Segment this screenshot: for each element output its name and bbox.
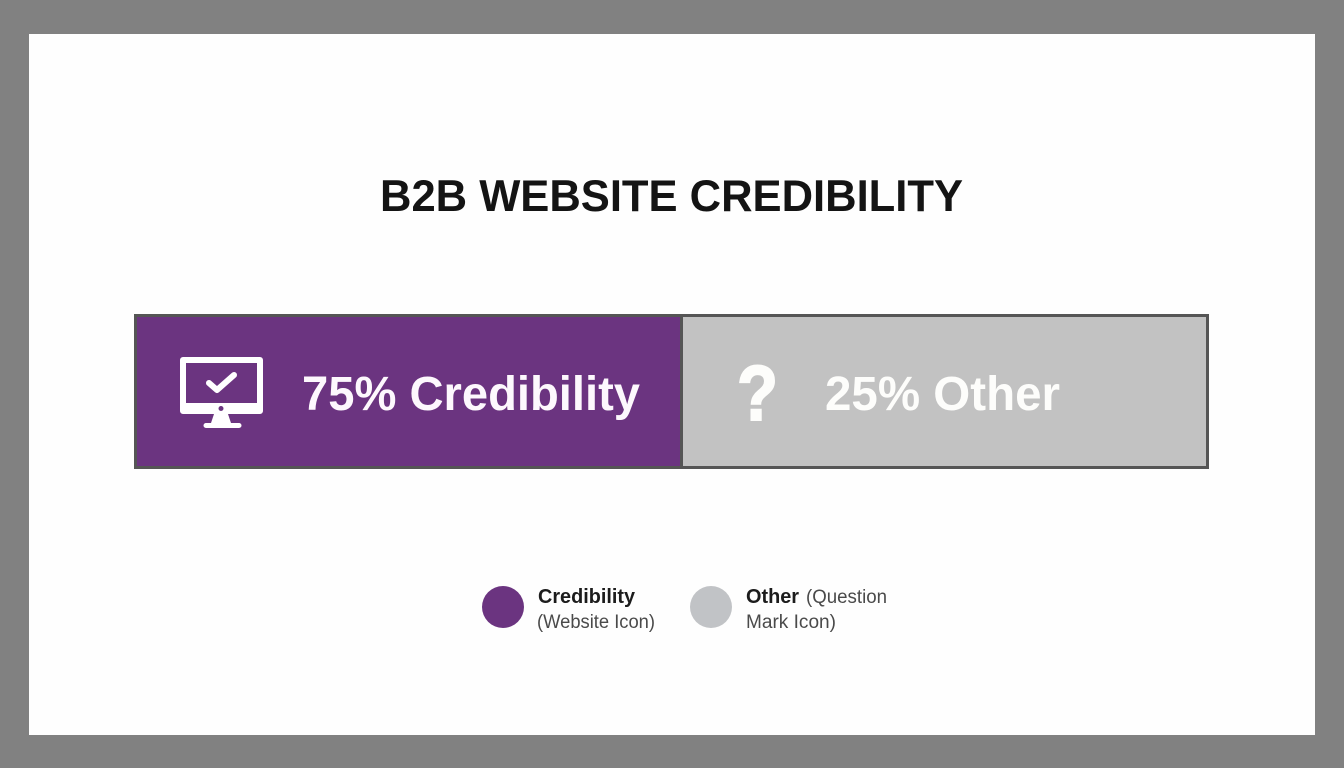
legend item: other: Other	[746, 586, 799, 608]
title: B2B WEBSITE CREDIBILITY	[380, 172, 963, 221]
legend item: other	[690, 586, 887, 633]
legend item: credibility: (Website Icon)	[537, 612, 655, 633]
label: 75% credibility: 75% Credibility	[302, 368, 640, 421]
bar frame	[134, 314, 1209, 469]
legend item: other: Mark Icon)	[746, 612, 836, 633]
segment: 25% other	[683, 317, 1206, 466]
icon: question mark: ?	[737, 349, 778, 437]
legend item: other: (Question	[806, 587, 887, 608]
legend	[482, 586, 887, 633]
legend item: credibility: Credibility	[538, 586, 636, 608]
segment: 75% credibility	[137, 317, 680, 466]
legend item: credibility	[482, 586, 655, 633]
stacked bar chart	[134, 314, 1209, 469]
icon: monitor with check mark	[180, 357, 263, 428]
label: 25% other: 25% Other	[825, 368, 1060, 421]
